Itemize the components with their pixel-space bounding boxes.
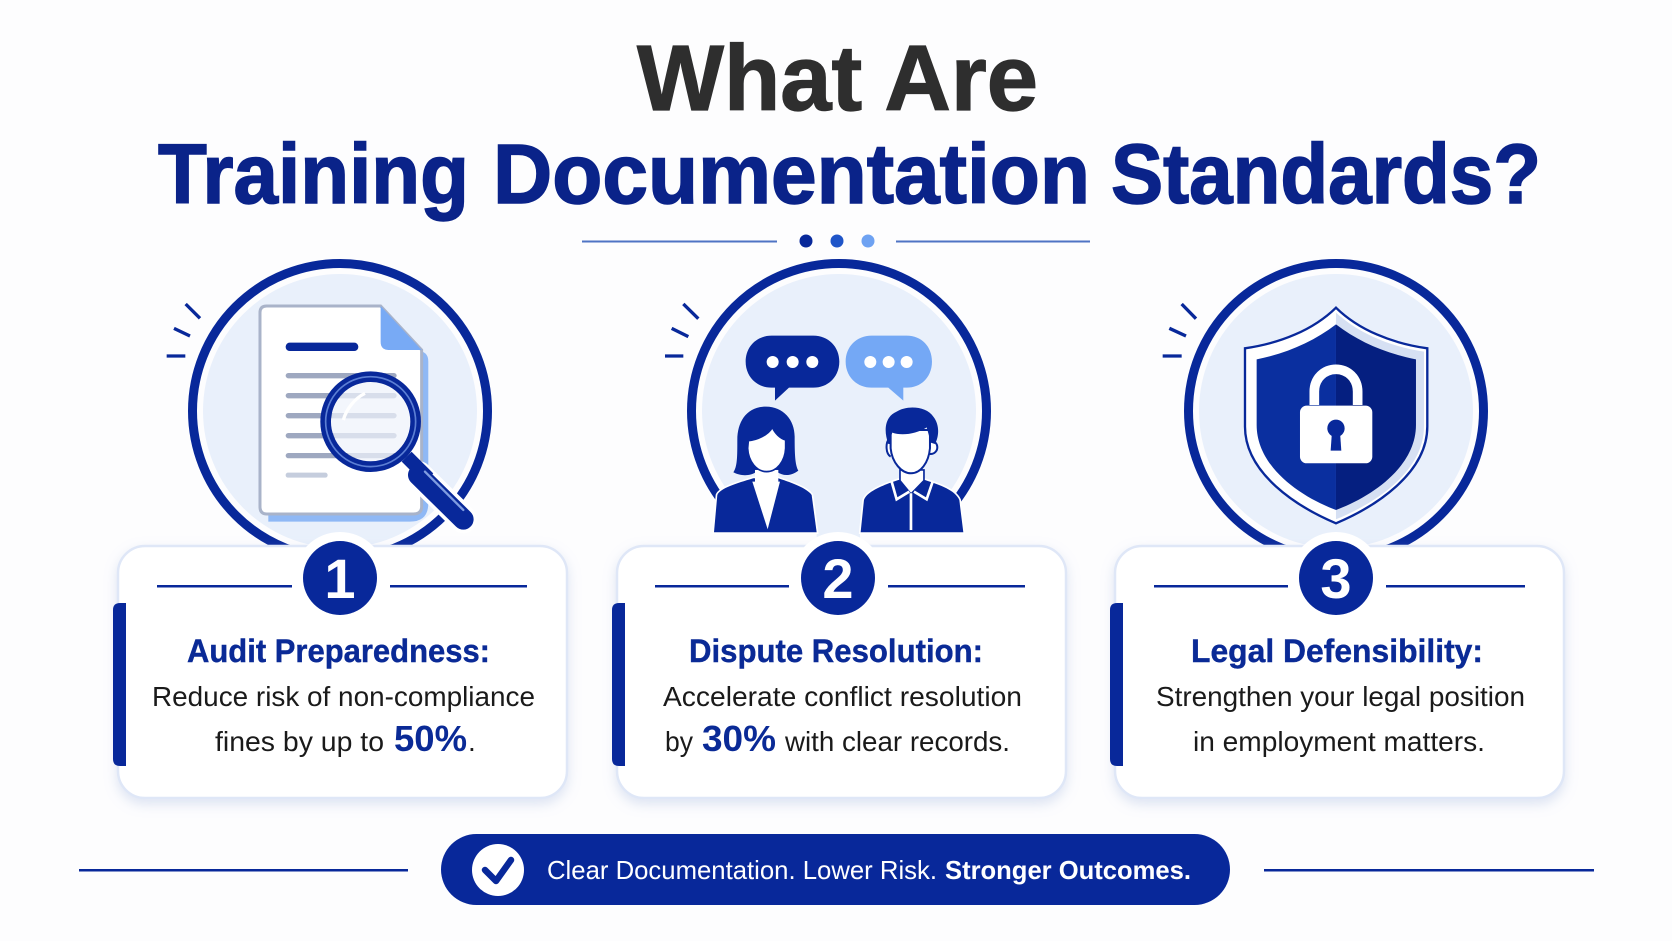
accent lines	[167, 304, 200, 356]
body text	[663, 681, 1022, 759]
body text	[1156, 681, 1525, 757]
body text: 50%	[394, 718, 467, 759]
body text: Strengthen your legal position	[1156, 681, 1525, 712]
card accent bar	[113, 603, 126, 766]
body text: .	[468, 726, 476, 757]
heading: Dispute Resolution:	[689, 633, 983, 669]
icon: document with magnifier	[260, 306, 463, 522]
icon: check mark	[472, 844, 524, 896]
footer message: Clear Documentation. Lower Risk.	[547, 855, 937, 885]
title line 2: Documentation	[493, 127, 1090, 221]
panel: dispute resolution icon	[665, 264, 1003, 558]
body text: Reduce risk of non-compliance	[152, 681, 535, 712]
title divider with dots	[582, 234, 1090, 248]
body text: fines by up to	[215, 726, 384, 757]
number badge 1: 1	[324, 547, 356, 610]
body text	[152, 681, 535, 759]
panel: legal defensibility icon	[1163, 264, 1484, 558]
icon: speech bubbles and two people	[673, 336, 1003, 546]
body text: by	[665, 726, 693, 757]
title	[158, 26, 1541, 221]
icon: shield with padlock	[1245, 308, 1427, 523]
accent lines	[665, 304, 698, 356]
woman	[714, 407, 817, 532]
panel: card 1	[113, 532, 567, 798]
panel: card 3	[1110, 532, 1564, 798]
body text: in employment matters.	[1193, 726, 1485, 757]
man	[861, 407, 963, 532]
number badge 3: 3	[1320, 547, 1352, 610]
accent lines	[1163, 304, 1196, 356]
number badge 2: 2	[822, 547, 854, 610]
panel: card 2	[612, 532, 1066, 798]
heading: Audit Preparedness:	[187, 633, 490, 669]
number badge 3	[1154, 532, 1525, 624]
number badge 2	[655, 532, 1025, 624]
number badge 1	[157, 532, 527, 624]
heading: Legal Defensibility:	[1191, 633, 1483, 669]
footer banner: Stronger Outcomes.	[945, 855, 1191, 885]
speech bubble dark	[746, 336, 839, 401]
body text: 30%	[702, 718, 776, 759]
title line 2: Standards?	[1111, 127, 1541, 221]
speech bubble light	[846, 336, 932, 401]
footer banner	[79, 834, 1594, 905]
body text: with clear records.	[784, 726, 1010, 757]
title line 2: Training	[158, 127, 469, 221]
body text: Accelerate conflict resolution	[663, 681, 1022, 712]
card accent bar	[1110, 603, 1123, 766]
card accent bar	[612, 603, 625, 766]
panel: audit preparedness icon	[167, 264, 488, 558]
title line 1: What Are	[637, 26, 1038, 130]
